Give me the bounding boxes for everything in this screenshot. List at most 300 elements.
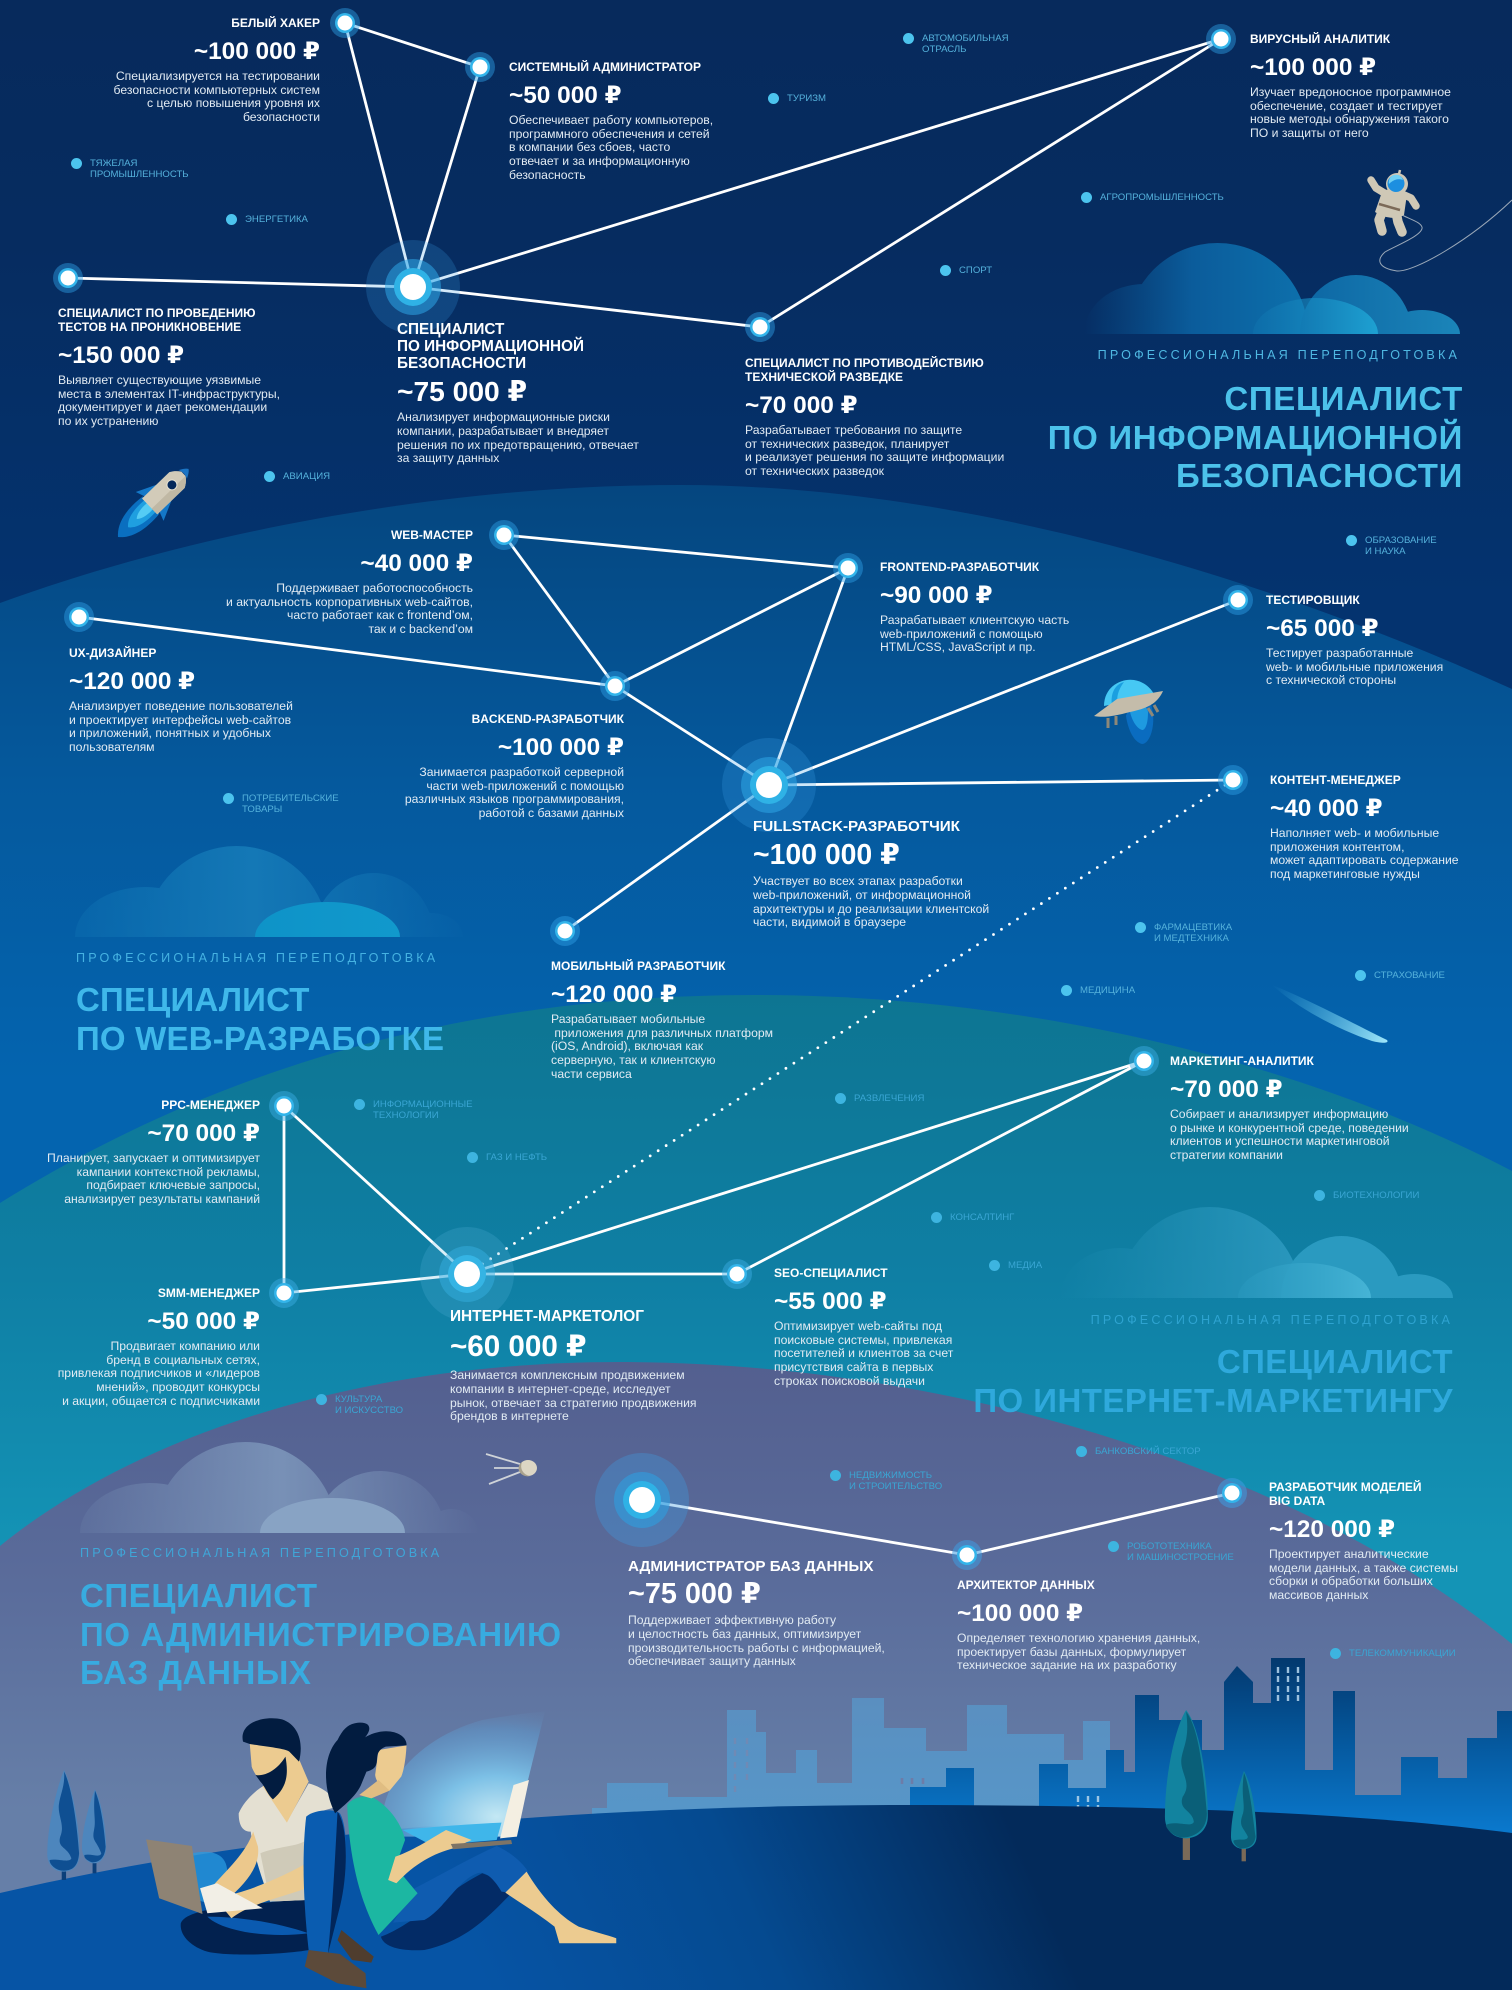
job: ppc: PPC-МЕНЕДЖЕР — [161, 1098, 260, 1112]
job: ux designer: и проектирует интерфейсы web-сайтов — [69, 713, 291, 727]
job: internet marketer: Занимается комплексным продвижением — [450, 1368, 685, 1382]
node: smm — [269, 1278, 299, 1308]
job: security specialist: за защиту данных — [397, 451, 499, 465]
job: fullstack: ~100 000 ₽ — [753, 839, 900, 871]
job: ux designer: Анализирует поведение пользователей — [69, 699, 293, 713]
job: tester: ~65 000 ₽ — [1266, 614, 1379, 642]
job: frontend: FRONTEND-РАЗРАБОТЧИК — [880, 560, 1039, 574]
job: big data — [1269, 1480, 1458, 1602]
tag: education: И НАУКА — [1365, 546, 1406, 557]
job: backend: части web-приложений с помощью — [426, 779, 624, 793]
tag: consulting: КОНСАЛТИНГ — [950, 1212, 1014, 1223]
node: mobile — [550, 916, 580, 946]
job: internet marketer: рынок, отвечает за стратегию продвижения — [450, 1396, 696, 1410]
job: mobile: (iOS, Android), включая как — [551, 1039, 703, 1053]
city: dark skyline — [910, 1658, 1512, 1850]
man face — [250, 1744, 300, 1790]
man hair — [243, 1718, 301, 1762]
man pants — [181, 1898, 318, 1955]
job: white hacker: безопасности — [243, 110, 320, 124]
job: security specialist: СПЕЦИАЛИСТ — [397, 321, 504, 338]
tag: IT — [354, 1099, 472, 1121]
job: security specialist: Анализирует информационные риски — [397, 410, 610, 424]
job: virus analyst: новые методы обнаружения такого — [1250, 112, 1449, 126]
tag: real estate: И СТРОИТЕЛЬСТВО — [849, 1481, 942, 1492]
icon: astronaut — [1371, 170, 1512, 271]
job: big data: массивов данных — [1269, 1588, 1368, 1602]
job: dba: ~75 000 ₽ — [628, 1578, 761, 1610]
job: tester: с технической стороны — [1266, 673, 1396, 687]
man laptop glow — [192, 1852, 227, 1903]
title: security: СПЕЦИАЛИСТ — [1224, 380, 1463, 417]
job: seo: строках поисковой выдачи — [774, 1374, 925, 1388]
job: fullstack — [753, 818, 989, 929]
tag: culture — [316, 1394, 403, 1416]
job: tester: Тестирует разработанные — [1266, 646, 1413, 660]
job: virus analyst — [1250, 32, 1451, 140]
job: sysadmin: в компании без сбоев, часто — [509, 140, 670, 154]
man leg shade — [328, 1812, 346, 1954]
job: ux designer — [69, 646, 293, 754]
city: windows — [735, 1667, 1298, 1808]
job: marketing analyst — [1170, 1054, 1409, 1162]
job: smm: мнений», проводит конкурсы — [96, 1380, 260, 1394]
node: seo — [722, 1259, 752, 1289]
title: marketing — [973, 1343, 1453, 1418]
constellation: database lines — [642, 1493, 1232, 1555]
job: sysadmin: программного обеспечения и сетей — [509, 127, 710, 141]
man t-shirt — [239, 1783, 338, 1902]
job: smm: привлекая подписчиков и «лидеров — [58, 1366, 260, 1380]
job: dba — [628, 1558, 885, 1668]
job: seo: поисковые системы, привлекая — [774, 1333, 952, 1347]
cloud: security — [1084, 243, 1460, 334]
job: content manager: под маркетинговые нужды — [1270, 867, 1420, 881]
job: big data: модели данных, а также системы — [1269, 1561, 1458, 1575]
job: big data: РАЗРАБОТЧИК МОДЕЛЕЙ — [1269, 1480, 1422, 1494]
job: counter intelligence: и реализует решения по защите информации — [745, 450, 1004, 464]
job: frontend: HTML/CSS, JavaScript и пр. — [880, 640, 1036, 654]
job: big data: BIG DATA — [1269, 1494, 1325, 1508]
job: data architect — [957, 1578, 1200, 1672]
job: ux designer: пользователям — [69, 740, 155, 754]
title: databases: ПО АДМИНИСТРИРОВАНИЮ — [80, 1616, 562, 1652]
title: security: ПО ИНФОРМАЦИОННОЙ — [1048, 418, 1463, 456]
constellation: web lines — [79, 535, 1238, 931]
city: light skyline — [592, 1698, 1110, 1815]
job: seo: посетителей и клиентов за счет — [774, 1346, 953, 1360]
heading: databases — [80, 1546, 562, 1691]
tag: pharma — [1135, 922, 1232, 944]
woman laptop screen — [500, 1780, 529, 1838]
node: backend — [600, 671, 630, 701]
woman shirt — [347, 1796, 418, 1935]
job: ppc: подбирает ключевые запросы, — [86, 1178, 260, 1192]
node: dba — [595, 1453, 689, 1547]
job: mobile: МОБИЛЬНЫЙ РАЗРАБОТЧИК — [551, 959, 725, 973]
tag: pharma: И МЕДТЕХНИКА — [1154, 933, 1229, 944]
trees: right — [1165, 1710, 1257, 1861]
title: databases: СПЕЦИАЛИСТ — [80, 1577, 318, 1614]
man shoe front — [305, 1950, 366, 1988]
tag: heavy industry: ТЯЖЕЛАЯ — [90, 158, 137, 169]
icon: comet — [1272, 985, 1388, 1043]
tag: entertainment: РАЗВЛЕЧЕНИЯ — [854, 1093, 924, 1104]
job: marketing analyst: стратегии компании — [1170, 1148, 1283, 1162]
job: white hacker — [114, 16, 320, 124]
job: mobile: Разрабатывает мобильные — [551, 1012, 705, 1026]
job: pentester: ~150 000 ₽ — [58, 342, 184, 368]
eyebrow: security: ПРОФЕССИОНАЛЬНАЯ ПЕРЕПОДГОТОВКА — [1098, 348, 1460, 362]
job: content manager: Наполняет web- и мобильные — [1270, 826, 1439, 840]
job: ppc: Планирует, запускает и оптимизирует — [47, 1151, 260, 1165]
job: backend: Занимается разработкой серверной — [419, 765, 624, 779]
tag: aviation: АВИАЦИЯ — [283, 471, 330, 482]
man laptop screen — [146, 1839, 203, 1914]
tag: IT: ИНФОРМАЦИОННЫЕ — [373, 1099, 472, 1110]
woman leg shadow — [381, 1873, 518, 1950]
tag: banking: БАНКОВСКИЙ СЕКТОР — [1095, 1446, 1201, 1457]
job: backend: работой с базами данных — [479, 806, 624, 820]
job: smm: бренд в социальных сетях, — [106, 1353, 260, 1367]
node: counter intelligence — [745, 312, 775, 342]
job: counter intelligence: от технических разведок — [745, 464, 884, 478]
job: pentester: Выявляет существующие уязвимые — [58, 373, 261, 387]
tag: sport: СПОРТ — [959, 265, 992, 276]
job: security specialist: ~75 000 ₽ — [397, 375, 527, 407]
job: security specialist: ПО ИНФОРМАЦИОННОЙ — [397, 338, 584, 355]
tag: pharma: ФАРМАЦЕВТИКА — [1154, 922, 1232, 933]
job: data architect: Определяет технологию хранения данных, — [957, 1631, 1200, 1645]
job: ppc — [47, 1098, 260, 1206]
man beard — [256, 1757, 287, 1799]
job: fullstack: Участвует во всех этапах разработки — [753, 874, 963, 888]
job: counter intelligence — [745, 356, 1004, 478]
job: white hacker: Специализируется на тестировании — [116, 69, 320, 83]
job: smm — [58, 1286, 260, 1408]
node: marketing analyst — [1129, 1046, 1159, 1076]
job: marketing analyst: клиентов и успешности маркетинговой — [1170, 1134, 1390, 1148]
job: ppc: анализирует результаты кампаний — [64, 1192, 260, 1206]
job: security specialist — [397, 321, 639, 465]
job: fullstack: FULLSTACK-РАЗРАБОТЧИК — [753, 818, 960, 835]
job: internet marketer: ~60 000 ₽ — [450, 1330, 587, 1363]
man pants highlight — [207, 1917, 309, 1935]
job: mobile: ~120 000 ₽ — [551, 980, 677, 1008]
job: ppc: ~70 000 ₽ — [147, 1120, 260, 1146]
tag: consumer goods — [223, 793, 339, 815]
cloud: databases — [80, 1442, 478, 1533]
job: mobile — [551, 959, 773, 1081]
job: virus analyst: ВИРУСНЫЙ АНАЛИТИК — [1250, 32, 1390, 46]
job: big data: ~120 000 ₽ — [1269, 1516, 1395, 1542]
job: sysadmin: СИСТЕМНЫЙ АДМИНИСТРАТОР — [509, 60, 701, 74]
tag: automotive: АВТОМОБИЛЬНАЯ — [922, 33, 1009, 44]
title: web: ПО WEB-РАЗРАБОТКЕ — [76, 1020, 444, 1056]
tag: agro: АГРОПРОМЫШЛЕННОСТЬ — [1100, 192, 1224, 203]
tag: energy: ЭНЕРГЕТИКА — [245, 214, 308, 225]
job: frontend: ~90 000 ₽ — [880, 582, 993, 608]
tag: consumer goods: ПОТРЕБИТЕЛЬСКИЕ — [242, 793, 339, 804]
job: data architect: техническое задание на их разработку — [957, 1658, 1177, 1672]
job: backend: ~100 000 ₽ — [498, 734, 624, 760]
job: backend: BACKEND-РАЗРАБОТЧИК — [472, 712, 624, 726]
tag: education: ОБРАЗОВАНИЕ — [1365, 535, 1437, 546]
job: security specialist: решения по их предотвращению, отвечает — [397, 438, 639, 452]
tag: culture: И ИСКУССТВО — [335, 1405, 403, 1416]
job: frontend: web-приложений с помощью — [880, 627, 1043, 641]
woman laptop base — [451, 1840, 512, 1849]
job: seo: Оптимизирует web-сайты под — [774, 1319, 942, 1333]
tag: robotics: И МАШИНОСТРОЕНИЕ — [1127, 1552, 1234, 1563]
constellation: security lines — [68, 23, 1221, 327]
job: data architect: АРХИТЕКТОР ДАННЫХ — [957, 1578, 1095, 1592]
tag: media — [989, 1260, 1042, 1271]
job: white hacker: безопасности компьютерных систем — [114, 83, 320, 97]
job: internet marketer: компании в интернет-среде, исследует — [450, 1382, 671, 1396]
job: mobile: части сервиса — [551, 1067, 632, 1081]
title: web — [76, 981, 444, 1056]
job: ux designer: ~120 000 ₽ — [69, 668, 195, 694]
node: web master — [489, 520, 519, 550]
job: big data: Проектирует аналитические — [1269, 1547, 1429, 1561]
job: data architect: проектирует базы данных, формулирует — [957, 1645, 1186, 1659]
job: fullstack: части, видимой в браузере — [753, 915, 906, 929]
job: white hacker: БЕЛЫЙ ХАКЕР — [231, 16, 320, 30]
tag: IT: ТЕХНОЛОГИИ — [373, 1110, 439, 1121]
job: sysadmin — [509, 60, 713, 182]
job: pentester: ТЕСТОВ НА ПРОНИКНОВЕНИЕ — [58, 320, 241, 334]
job: counter intelligence: от технических разведок, планирует — [745, 437, 949, 451]
eyebrow: databases: ПРОФЕССИОНАЛЬНАЯ ПЕРЕПОДГОТОВКА — [80, 1546, 442, 1560]
icon: ufo — [1094, 680, 1163, 744]
job: fullstack: архитектуры и до реализации клиентской — [753, 902, 989, 916]
tag: robotics — [1108, 1541, 1234, 1563]
job: pentester: документирует и дает рекомендации — [58, 400, 267, 414]
job: virus analyst: обеспечение, создает и тестирует — [1250, 99, 1443, 113]
job: dba: обеспечивает защиту данных — [628, 1654, 796, 1668]
icon: satellite — [486, 1454, 537, 1484]
man forearm — [222, 1863, 306, 1918]
job: marketing analyst: о рынке и конкурентной среде, поведении — [1170, 1121, 1409, 1135]
title: web: СПЕЦИАЛИСТ — [76, 981, 310, 1018]
job: white hacker: с целью повышения уровня их — [147, 96, 320, 110]
tag: tourism: ТУРИЗМ — [787, 93, 826, 104]
job: tester: web- и мобильные приложения — [1266, 660, 1443, 674]
job: web master: ~40 000 ₽ — [360, 550, 473, 576]
eyebrow: web: ПРОФЕССИОНАЛЬНАЯ ПЕРЕПОДГОТОВКА — [76, 951, 438, 965]
tag: heavy industry — [71, 158, 189, 180]
tag: real estate: НЕДВИЖИМОСТЬ — [849, 1470, 932, 1481]
job: backend: различных языков программирования, — [405, 792, 624, 806]
woman hair — [326, 1723, 407, 1813]
job: content manager — [1270, 773, 1459, 881]
woman pants — [393, 1846, 528, 1923]
job: dba: производительность работы с информацией, — [628, 1641, 885, 1655]
job: smm: и акции, общается с подписчиками — [62, 1394, 260, 1408]
job: content manager: приложения контентом, — [1270, 840, 1404, 854]
trees: left — [47, 1770, 106, 1880]
node: frontend — [833, 553, 863, 583]
tag: oil and gas: ГАЗ И НЕФТЬ — [486, 1152, 547, 1163]
job: virus analyst: ПО и защиты от него — [1250, 126, 1369, 140]
job: seo: присутствия сайта в первых — [774, 1360, 933, 1374]
glow: woman laptop light — [383, 1712, 545, 1837]
job: virus analyst: Изучает вредоносное программное — [1250, 85, 1451, 99]
job: content manager: ~40 000 ₽ — [1270, 794, 1383, 822]
cloud: web — [75, 846, 463, 937]
job: frontend — [880, 560, 1069, 654]
heading: web — [76, 951, 444, 1056]
job: sysadmin: отвечает и за информационную — [509, 154, 690, 168]
job: pentester: по их устранению — [58, 414, 158, 428]
tag: heavy industry: ПРОМЫШЛЕННОСТЬ — [90, 169, 189, 180]
job: fullstack: web-приложений, от информационной — [753, 888, 971, 902]
job: smm: ~50 000 ₽ — [147, 1308, 260, 1334]
eyebrow: marketing: ПРОФЕССИОНАЛЬНАЯ ПЕРЕПОДГОТОВКА — [1091, 1313, 1453, 1327]
title: security — [1048, 380, 1463, 494]
job: seo: ~55 000 ₽ — [774, 1288, 887, 1314]
planet: web development — [0, 485, 1512, 1990]
tag: telecom: ТЕЛЕКОММУНИКАЦИИ — [1349, 1648, 1456, 1659]
job: dba: Поддерживает эффективную работу — [628, 1613, 836, 1627]
job: smm: Продвигает компанию или — [110, 1339, 260, 1353]
job: dba: АДМИНИСТРАТОР БАЗ ДАННЫХ — [628, 1558, 874, 1575]
job: ux designer: UX-ДИЗАЙНЕР — [69, 646, 156, 660]
job: smm: SMM-МЕНЕДЖЕР — [158, 1286, 260, 1300]
title: marketing: ПО ИНТЕРНЕТ-МАРКЕТИНГУ — [973, 1382, 1453, 1418]
tag: tourism — [768, 93, 826, 104]
title: marketing: СПЕЦИАЛИСТ — [1217, 1343, 1453, 1380]
job: mobile: серверную, так и клиентскую — [551, 1053, 716, 1067]
node: big data — [1217, 1478, 1247, 1508]
job: ux designer: и приложений, понятных и удобных — [69, 726, 271, 740]
job: counter intelligence: ~70 000 ₽ — [745, 392, 858, 418]
title: security: БЕЗОПАСНОСТИ — [1176, 457, 1463, 494]
job: virus analyst: ~100 000 ₽ — [1250, 54, 1376, 80]
job: pentester: СПЕЦИАЛИСТ ПО ПРОВЕДЕНИЮ — [58, 306, 256, 320]
job: tester — [1266, 593, 1443, 687]
man shirt shade — [260, 1840, 306, 1902]
dotted link: content manager to internet marketer — [467, 780, 1233, 1274]
job: pentester: места в элементах IT-инфраструктуры, — [58, 387, 280, 401]
tag: medicine: МЕДИЦИНА — [1080, 985, 1135, 996]
constellation: marketing lines — [284, 1061, 1144, 1293]
job: seo — [774, 1266, 954, 1388]
node: fullstack — [722, 738, 816, 832]
node: pentester — [53, 263, 83, 293]
job: backend — [405, 712, 624, 820]
job: data architect: ~100 000 ₽ — [957, 1600, 1083, 1626]
job: content manager: КОНТЕНТ-МЕНЕДЖЕР — [1270, 773, 1401, 787]
job: marketing analyst: МАРКЕТИНГ-АНАЛИТИК — [1170, 1054, 1314, 1068]
woman shin — [505, 1872, 616, 1943]
node: content manager — [1218, 765, 1248, 795]
man knee — [304, 1810, 346, 1954]
job: counter intelligence: ТЕХНИЧЕСКОЙ РАЗВЕДКЕ — [745, 370, 903, 384]
job: white hacker: ~100 000 ₽ — [194, 38, 320, 64]
ground hill — [0, 1805, 1512, 1990]
tag: consumer goods: ТОВАРЫ — [242, 804, 282, 815]
job: internet marketer: ИНТЕРНЕТ-МАРКЕТОЛОГ — [450, 1308, 644, 1325]
tag: biotech: БИОТЕХНОЛОГИИ — [1333, 1190, 1419, 1201]
job: internet marketer — [450, 1308, 696, 1423]
planet: internet marketing — [0, 995, 1512, 1990]
node: tester — [1223, 585, 1253, 615]
job: internet marketer: брендов в интернете — [450, 1409, 569, 1423]
job: sysadmin: ~50 000 ₽ — [509, 82, 622, 108]
woman arm — [388, 1830, 472, 1883]
job: web master: и актуальность корпоративных web-сайтов, — [226, 595, 473, 609]
woman neck — [359, 1780, 390, 1798]
lit ground — [403, 1823, 501, 1847]
man shoe back — [338, 1930, 374, 1963]
job: sysadmin: безопасность — [509, 168, 586, 182]
node: virus analyst — [1206, 24, 1236, 54]
job: big data: сборки и обработки больших — [1269, 1574, 1433, 1588]
job: web master: часто работает как с frontend’ом, — [287, 608, 473, 622]
title: databases: БАЗ ДАННЫХ — [80, 1654, 311, 1691]
title: databases — [80, 1577, 562, 1691]
tag: culture: КУЛЬТУРА — [335, 1394, 382, 1405]
tag: sport — [940, 265, 992, 276]
job: counter intelligence: Разрабатывает требования по защите — [745, 423, 962, 437]
tag: real estate — [830, 1470, 942, 1492]
node: internet marketer — [420, 1227, 514, 1321]
heading: security — [1048, 348, 1463, 494]
tag: education — [1346, 535, 1437, 557]
man laptop base — [200, 1883, 263, 1913]
tag: robotics: РОБОТОТЕХНИКА — [1127, 1541, 1212, 1552]
node: white hacker — [330, 8, 360, 38]
tag: automotive: ОТРАСЛЬ — [922, 44, 966, 55]
job: pentester — [58, 306, 280, 428]
job: web master — [226, 528, 473, 636]
node: data architect — [952, 1540, 982, 1570]
tag: insurance: СТРАХОВАНИЕ — [1374, 970, 1445, 981]
planet: databases — [0, 1362, 1512, 1990]
job: security specialist: БЕЗОПАСНОСТИ — [397, 355, 526, 372]
node: sysadmin — [465, 52, 495, 82]
icon: rocket — [104, 455, 202, 551]
man arm — [212, 1832, 258, 1900]
job: dba: и целостность баз данных, оптимизирует — [628, 1627, 861, 1641]
heading: marketing — [973, 1313, 1453, 1418]
job: web master: так и с backend’ом — [368, 622, 473, 636]
job: marketing analyst: Собирает и анализирует информацию — [1170, 1107, 1388, 1121]
job: counter intelligence: СПЕЦИАЛИСТ ПО ПРОТИВОДЕЙСТВИЮ — [745, 356, 984, 370]
node: ux designer — [64, 602, 94, 632]
tag: media: МЕДИА — [1008, 1260, 1042, 1271]
node: ppc — [269, 1091, 299, 1121]
job: frontend: Разрабатывает клиентскую часть — [880, 613, 1069, 627]
tag: automotive — [903, 33, 1009, 55]
job: marketing analyst: ~70 000 ₽ — [1170, 1076, 1283, 1102]
job: ppc: кампании контекстной рекламы, — [77, 1165, 260, 1179]
man neck — [263, 1753, 309, 1823]
job: seo: SEO-СПЕЦИАЛИСТ — [774, 1266, 888, 1280]
job: security specialist: компании, разрабатывает и внедряет — [397, 424, 609, 438]
people: man and woman with laptops — [146, 1712, 616, 1988]
job: tester: ТЕСТИРОВЩИК — [1266, 593, 1360, 607]
woman face — [375, 1745, 406, 1791]
job: web master: Поддерживает работоспособность — [276, 581, 473, 595]
job: web master: WEB-МАСТЕР — [391, 528, 473, 542]
node: main security — [366, 240, 460, 334]
job: content manager: может адаптировать содержание — [1270, 853, 1459, 867]
cloud: marketing — [1060, 1207, 1453, 1298]
job: sysadmin: Обеспечивает работу компьютеров, — [509, 113, 713, 127]
